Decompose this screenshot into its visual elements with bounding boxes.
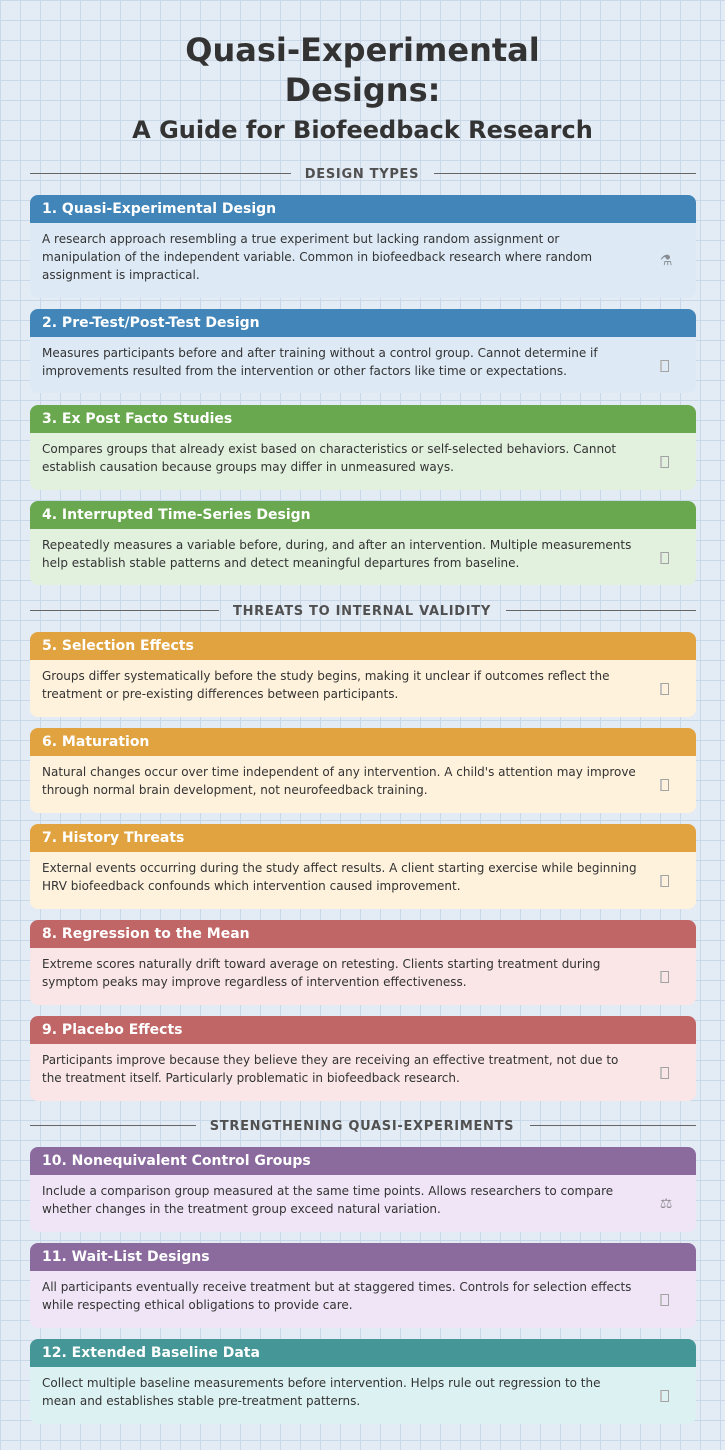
card 5: selection effects (30, 632, 696, 717)
card 11: wait-list designs: 11. Wait-List Designs (42, 1249, 210, 1265)
card 1: quasi-experimental design: manipulation of the independent variable. Common in biofeedback research where random (42, 250, 592, 264)
card 1: quasi-experimental design (30, 195, 696, 298)
card 1: quasi-experimental design: assignment is impractical. (42, 268, 200, 282)
card 5: selection effects: 5. Selection Effects (42, 638, 194, 654)
card 6: maturation: Natural changes occur over time independent of any intervention. A child's attention may improve (42, 765, 636, 779)
card 9: placebo effects: Participants improve because they believe they are receiving an effective treatment, not due to (42, 1053, 618, 1067)
card 11: wait-list designs: while respecting ethical obligations to provide care. (42, 1298, 353, 1312)
card 4: interrupted time-series design: help establish stable patterns and detect meaningful departures from baseline. (42, 556, 519, 570)
card 9: placebo effects: 9. Placebo Effects (42, 1022, 182, 1038)
subtitle: A Guide for Biofeedback Research (132, 116, 593, 144)
card 6: maturation: through normal brain development, not neurofeedback training. (42, 783, 428, 797)
card 12: extended baseline data (30, 1339, 696, 1424)
card 8: regression to the mean: Extreme scores naturally drift toward average on retesting. Clients starting treatment during (42, 957, 600, 971)
card 7: history threats: External events occurring during the study affect results. A client starting exercise while beginning (42, 861, 637, 875)
card 1: quasi-experimental design: ⚗ (660, 253, 672, 269)
card 8: regression to the mean (30, 920, 696, 1005)
card 10: nonequivalent control groups: ⚖ (660, 1196, 672, 1212)
card 7: history threats (30, 824, 696, 909)
section heading: strengthening quasi-experiments: STRENGTHENING QUASI-EXPERIMENTS (210, 1119, 514, 1134)
title (185, 31, 540, 109)
card 3: ex post facto studies: 3. Ex Post Facto Studies (42, 411, 232, 427)
title: Designs: (285, 71, 440, 109)
card 9: placebo effects: the treatment itself. Particularly problematic in biofeedback research. (42, 1071, 460, 1085)
card 12: extended baseline data: 12. Extended Baseline Data (42, 1345, 260, 1361)
section heading: threats to internal validity: THREATS TO INTERNAL VALIDITY (233, 604, 491, 619)
card 10: nonequivalent control groups (30, 1147, 696, 1232)
card 6: maturation (30, 728, 696, 813)
card 1: quasi-experimental design: 1. Quasi-Experimental Design (42, 201, 276, 217)
card 2: pre-test/post-test design: 2. Pre-Test/Post-Test Design (42, 315, 260, 331)
card 8: regression to the mean: symptom peaks may improve regardless of intervention effectiveness. (42, 975, 467, 989)
card 6: maturation: 6. Maturation (42, 734, 149, 750)
card 5: selection effects: Groups differ systematically before the study begins, making it unclear if outcomes reflect the (42, 669, 610, 683)
card 3: ex post facto studies (30, 405, 696, 490)
card 8: regression to the mean: 8. Regression to the Mean (42, 926, 250, 942)
card 4: interrupted time-series design: Repeatedly measures a variable before, during, and after an intervention. Multiple measurements (42, 538, 631, 552)
card 3: ex post facto studies: establish causation because groups may differ in unmeasured ways. (42, 460, 454, 474)
card 10: nonequivalent control groups: 10. Nonequivalent Control Groups (42, 1153, 311, 1169)
card 7: history threats: 7. History Threats (42, 830, 184, 846)
card 12: extended baseline data: Collect multiple baseline measurements before intervention. Helps rule out regression to the (42, 1376, 601, 1390)
section heading: design types: DESIGN TYPES (305, 167, 419, 182)
card 11: wait-list designs (30, 1243, 696, 1328)
card 11: wait-list designs: All participants eventually receive treatment but at staggered times. Controls for selection effects (42, 1280, 631, 1294)
card 7: history threats: HRV biofeedback confounds which intervention caused improvement. (42, 879, 461, 893)
card 2: pre-test/post-test design: Measures participants before and after training without a control group. Cannot determine if (42, 346, 598, 360)
card 10: nonequivalent control groups: whether changes in the treatment group exceed natural variation. (42, 1202, 441, 1216)
card 9: placebo effects (30, 1016, 696, 1101)
card 10: nonequivalent control groups: Include a comparison group measured at the same time points. Allows researchers to compare (42, 1184, 613, 1198)
card 4: interrupted time-series design: 4. Interrupted Time-Series Design (42, 507, 311, 523)
card 2: pre-test/post-test design: improvements resulted from the intervention or other factors like time or expectations. (42, 364, 567, 378)
title: Quasi-Experimental (185, 31, 540, 69)
card 1: quasi-experimental design: A research approach resembling a true experiment but lacking random assignment or (42, 232, 559, 246)
card 5: selection effects: treatment or pre-existing differences between participants. (42, 687, 398, 701)
card 2: pre-test/post-test design (30, 309, 696, 393)
card 12: extended baseline data: mean and establishes stable pre-treatment patterns. (42, 1394, 360, 1408)
card 3: ex post facto studies: Compares groups that already exist based on characteristics or self-selected behaviors. Cannot (42, 442, 616, 456)
card 4: interrupted time-series design (30, 501, 696, 585)
